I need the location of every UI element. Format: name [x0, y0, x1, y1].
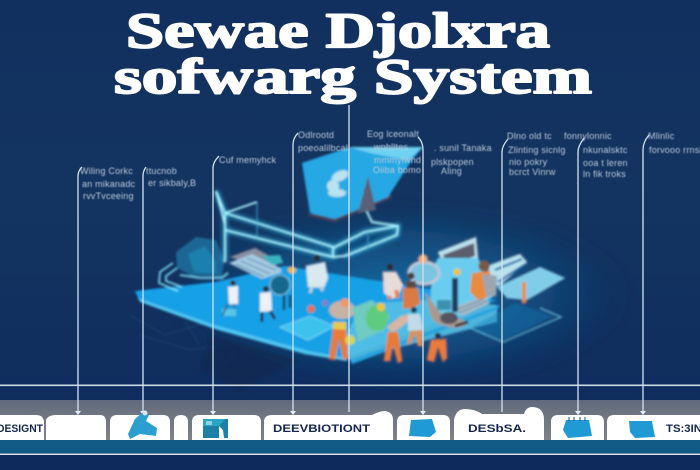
callout texts: er sikbaly,B [148, 178, 196, 188]
tray outline [470, 308, 561, 342]
platform: left section [135, 266, 497, 358]
dark shadow [200, 335, 300, 390]
glow behind the scene [160, 195, 640, 395]
tab: testing: TS:3IN [666, 423, 700, 435]
callout 4: Odlrootd [298, 130, 334, 140]
worker: orange trousers at left of the group [329, 298, 355, 360]
base footer [0, 455, 700, 470]
tab: deploy [454, 407, 544, 440]
callout texts: ooa t leren [583, 158, 628, 168]
callout 9: Mlinlic [648, 131, 675, 141]
document stack [229, 248, 283, 279]
light tray [497, 267, 565, 300]
tab: development [264, 411, 393, 440]
callout texts [80, 129, 700, 201]
tab: narrow [174, 415, 188, 440]
worker: group member 5 [427, 333, 447, 362]
platform highlights [280, 316, 335, 340]
worker: white coat 2 [260, 286, 275, 322]
worker: group member 4 [407, 307, 423, 346]
platform: right section [345, 300, 497, 360]
callout texts: bcrct Vinrw [509, 167, 556, 177]
callout texts: ln fik troks [583, 169, 626, 179]
small floating shapes [307, 305, 315, 313]
callout texts: rvvTvceeing [83, 191, 134, 201]
callout texts: Oiiba bomo [373, 165, 421, 175]
callout texts: plskpopen [431, 157, 474, 167]
orange seated figure [454, 260, 497, 300]
keyboard tray [483, 254, 527, 290]
worker: large white coat with globe [270, 254, 328, 310]
callout texts: nio pokry [509, 157, 548, 167]
title: Sewae Djolxra [126, 2, 550, 58]
callout texts: Zlinting sicnlg [508, 145, 566, 155]
title: sofwarg System [114, 48, 592, 104]
callout 8: fonnylonnic [564, 131, 612, 141]
grey band behind tabs [0, 400, 700, 440]
neon frame [216, 191, 398, 262]
worker: group member 2 [403, 272, 420, 309]
tab: development: DEEVBIOTIONT [273, 423, 370, 435]
isometric illustration: software delivery workspace [130, 147, 640, 395]
callout texts: Aling [441, 166, 462, 176]
tab: icon figure [110, 410, 170, 440]
callout 7: Dlno old tc [507, 131, 552, 141]
worker: white coat 1 [222, 280, 238, 316]
callout 2: ttucnob [146, 166, 177, 176]
neon frame glow [216, 191, 398, 262]
worker: group member 3 [384, 314, 411, 363]
tab: deploy: DESbSA. [468, 423, 526, 435]
worker: group member 1 [383, 264, 403, 299]
colourful platform cluster [345, 300, 390, 345]
callout 3: Cuf memyhck [219, 155, 277, 165]
orbit ring sculpture [409, 254, 468, 328]
connector arrows [75, 105, 649, 415]
teal base band [0, 440, 700, 453]
callout 6: . sunil Tanaka [434, 143, 492, 153]
title [114, 2, 592, 104]
tab: testing [607, 415, 700, 440]
tab: icon folder [397, 415, 450, 440]
callout texts: wnhlltes [373, 142, 408, 152]
callout 1: Wiling Corkc [80, 166, 133, 176]
laptop [430, 237, 496, 322]
callout texts: nkunalsktc [583, 145, 628, 155]
icon: cloud on monitor [327, 168, 350, 197]
tab: icon board [192, 415, 261, 440]
base rule [0, 454, 700, 455]
helmet-like shell [159, 237, 228, 291]
callout texts: mmmylwhd [374, 155, 421, 165]
tab: icon calendar [551, 415, 604, 440]
dark ground wireframe [130, 315, 235, 365]
callout texts: an mikanadc [82, 179, 136, 189]
bottom horizontal rail [0, 384, 700, 386]
stage tabs [0, 407, 700, 440]
tab: design [0, 415, 44, 440]
monitor [302, 147, 423, 222]
callout texts: poeoalilbcal [298, 143, 348, 153]
callout 5: Eog lceonalt [367, 129, 419, 139]
tab: blank [46, 415, 106, 440]
